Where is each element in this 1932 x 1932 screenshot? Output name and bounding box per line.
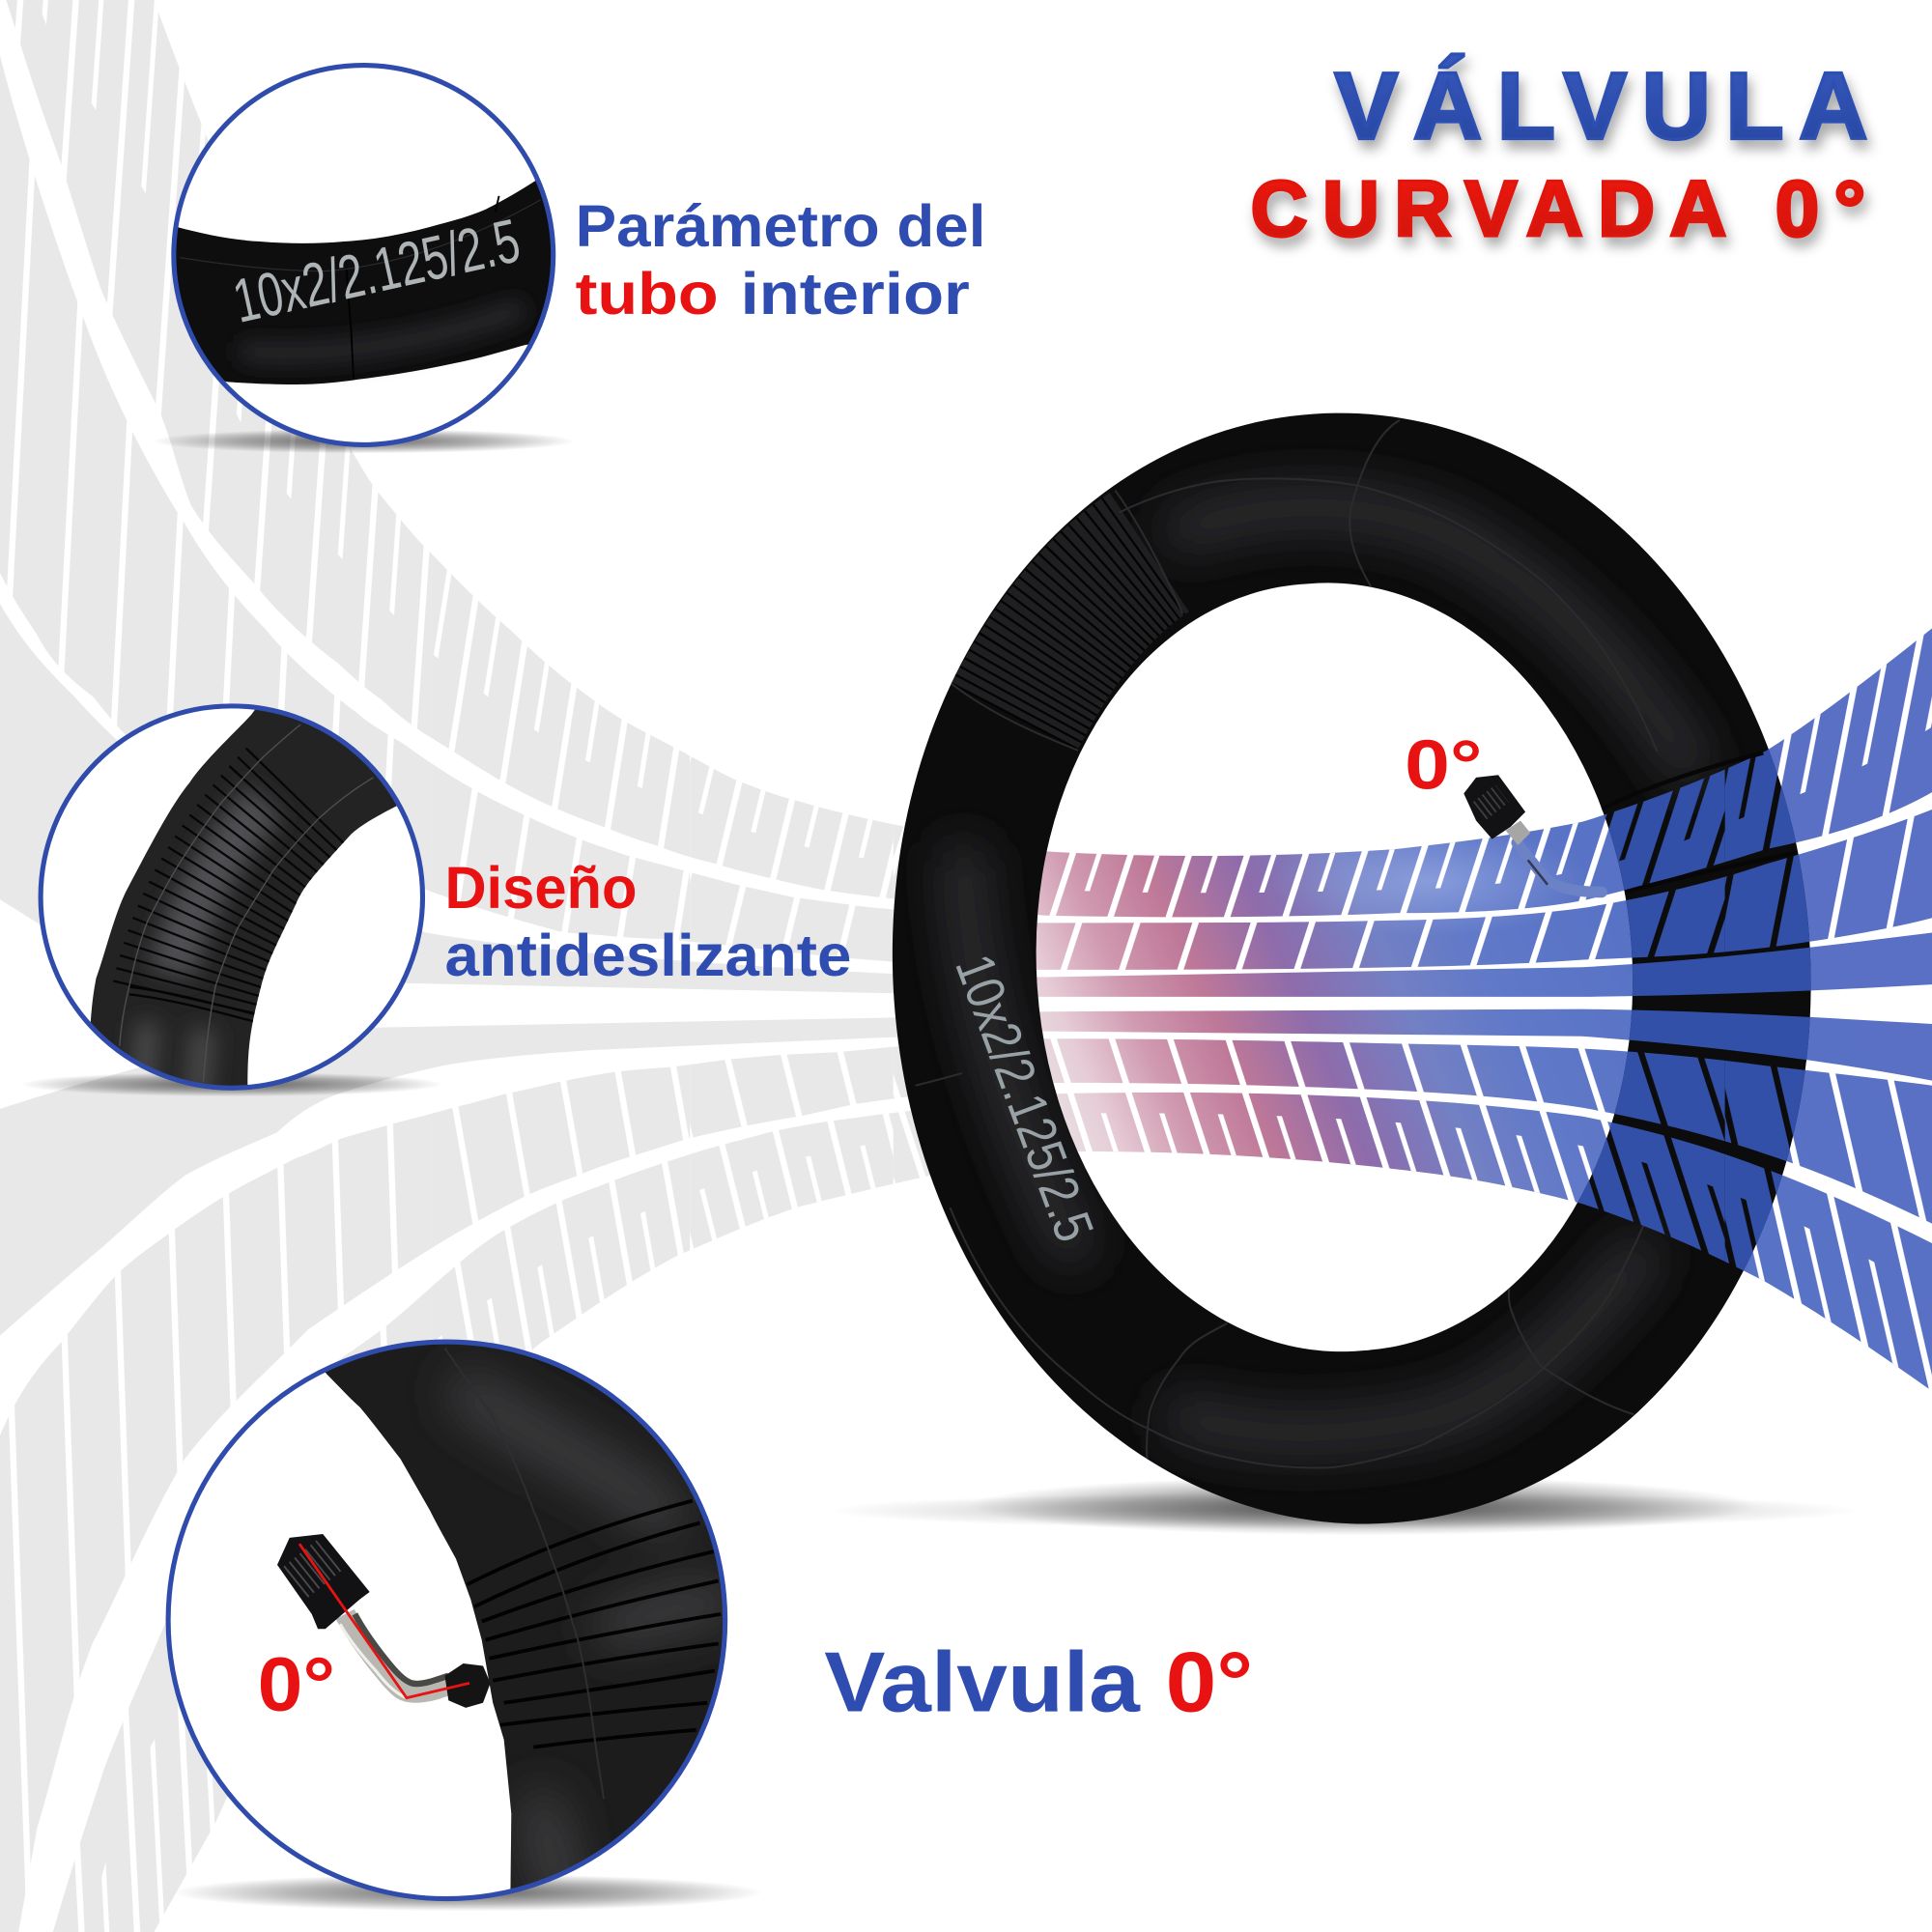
translucent tread overlay on tube [1577,750,1810,1271]
title: CURVADA 0° [1251,165,1880,253]
title [1251,52,1883,253]
ribbed section [1014,552,1150,717]
angle guide line [299,1544,469,1698]
inner tube photo [893,413,1811,1524]
icon: valve base [444,1663,491,1708]
tube seam over overlay [1602,752,1764,895]
tube sheen [963,507,1688,1434]
tube floor shadow [826,1476,1861,1535]
label: anti-slip design [444,855,851,988]
label: valve 0 degrees: Valvula [824,1634,1141,1730]
label: tube parameter: Parámetro del [576,193,985,259]
label: tube parameter [576,193,985,327]
panel: tube parameter detail circle [160,66,567,444]
icon: valve cap close-up [277,1534,370,1629]
valve with 0 degree label [1405,725,1602,892]
panel: anti-slip design detail circle [39,703,425,1091]
icon: valve stem close-up [345,1614,451,1692]
tube size text in circle: 10x2/2.125/2.5 [227,205,526,336]
icon: valve neck [1506,820,1530,845]
label: 0 degrees on tube: 0° [1405,725,1482,804]
tread highlight glow [1306,839,1558,925]
anti-slip ribs [191,804,304,1001]
icon: valve cap [1463,775,1525,839]
label: valve 0 degrees: 0° [1166,1634,1253,1730]
label: anti-slip design: Diseño [444,855,637,921]
label: valve 0 degrees [824,1634,1253,1730]
tube seams [916,420,1658,1467]
label: tube parameter: interior [741,261,970,327]
label: tube parameter: tubo [576,261,719,327]
title: VÁLVULA [1334,52,1883,158]
label: 0 degrees in circle: 0° [258,1640,335,1726]
tube size marking: 10x2/2.125/2.5 [944,947,1106,1249]
ribs [467,1501,721,1747]
icon: valve stem [1517,842,1602,892]
label: anti-slip design: antideslizante [444,923,851,988]
panel: valve detail circle [166,1339,728,1901]
circle shadows [19,429,764,1911]
